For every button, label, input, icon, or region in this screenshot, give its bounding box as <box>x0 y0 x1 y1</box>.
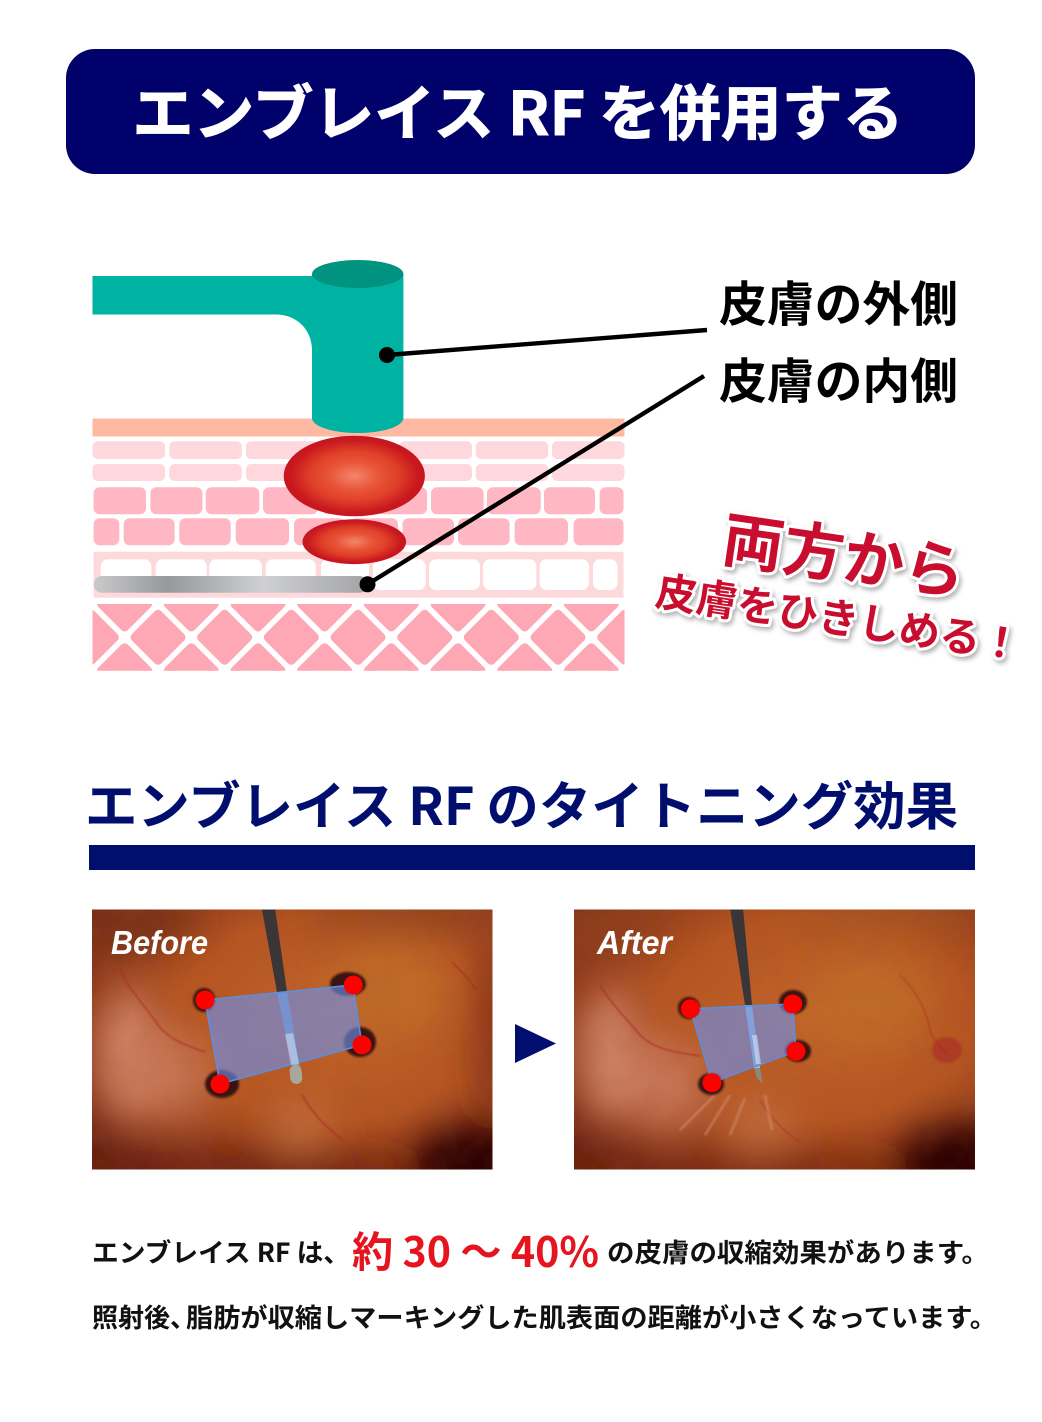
leader line to inner label <box>360 376 704 592</box>
leader line to outer label <box>379 330 707 363</box>
light cell rows <box>92 441 624 481</box>
arrow: before to after <box>515 1024 556 1063</box>
description line 1 <box>92 1219 989 1280</box>
marked area polygon <box>690 1004 796 1083</box>
needle highlight through polygon <box>752 1035 761 1064</box>
description line 1: エンブレイス RF は、 <box>92 1233 350 1270</box>
highlighted percentage: 約 30 ～ 40% <box>352 1219 599 1280</box>
cannula needle <box>262 908 303 1085</box>
inner cannula probe <box>94 576 368 593</box>
epidermis band <box>92 418 624 436</box>
description line 1: の皮膚の収縮効果があります。 <box>607 1233 989 1270</box>
photo: before <box>92 910 492 1170</box>
incision marks <box>193 972 376 1098</box>
label: outside of skin: 皮膚の外側 <box>719 265 958 335</box>
needle highlight through polygon <box>285 1033 299 1065</box>
RF heat zone upper <box>284 436 425 516</box>
pink cell rows <box>94 487 624 545</box>
description line 2: 脂肪が収縮しマーキングした肌表面の距離が小さくなっています。 <box>186 1298 997 1335</box>
fat cell layer <box>94 552 624 598</box>
callout: tighten from both sides: 皮膚をひきしめる！ <box>652 558 1026 672</box>
marker dots <box>681 994 806 1092</box>
veins and wrinkles <box>600 975 948 1142</box>
label: inside of skin: 皮膚の内側 <box>719 342 958 412</box>
marked area polygon <box>205 985 362 1084</box>
marker dots <box>196 976 372 1094</box>
photo: after <box>574 910 975 1170</box>
incision marks <box>678 990 811 1095</box>
before label: Before <box>111 924 208 961</box>
red skin patch <box>932 1037 962 1063</box>
outer handpiece <box>92 260 403 433</box>
cannula needle <box>730 908 763 1084</box>
skin diagram <box>92 260 624 671</box>
title banner <box>66 49 975 174</box>
callout: tighten from both sides <box>652 490 1026 672</box>
callout: tighten from both sides: 両方から <box>717 490 972 613</box>
after label: After <box>596 924 674 961</box>
title text: エンブレイス RF を併用する <box>132 66 904 153</box>
section heading: エンブレイス RF のタイトニング効果 <box>85 765 958 840</box>
description line 2: 照射後、 <box>92 1298 196 1335</box>
RF heat zone lower <box>302 519 406 564</box>
section heading bar <box>89 845 975 870</box>
veins <box>120 962 476 1142</box>
lattice tissue layer <box>92 604 624 671</box>
